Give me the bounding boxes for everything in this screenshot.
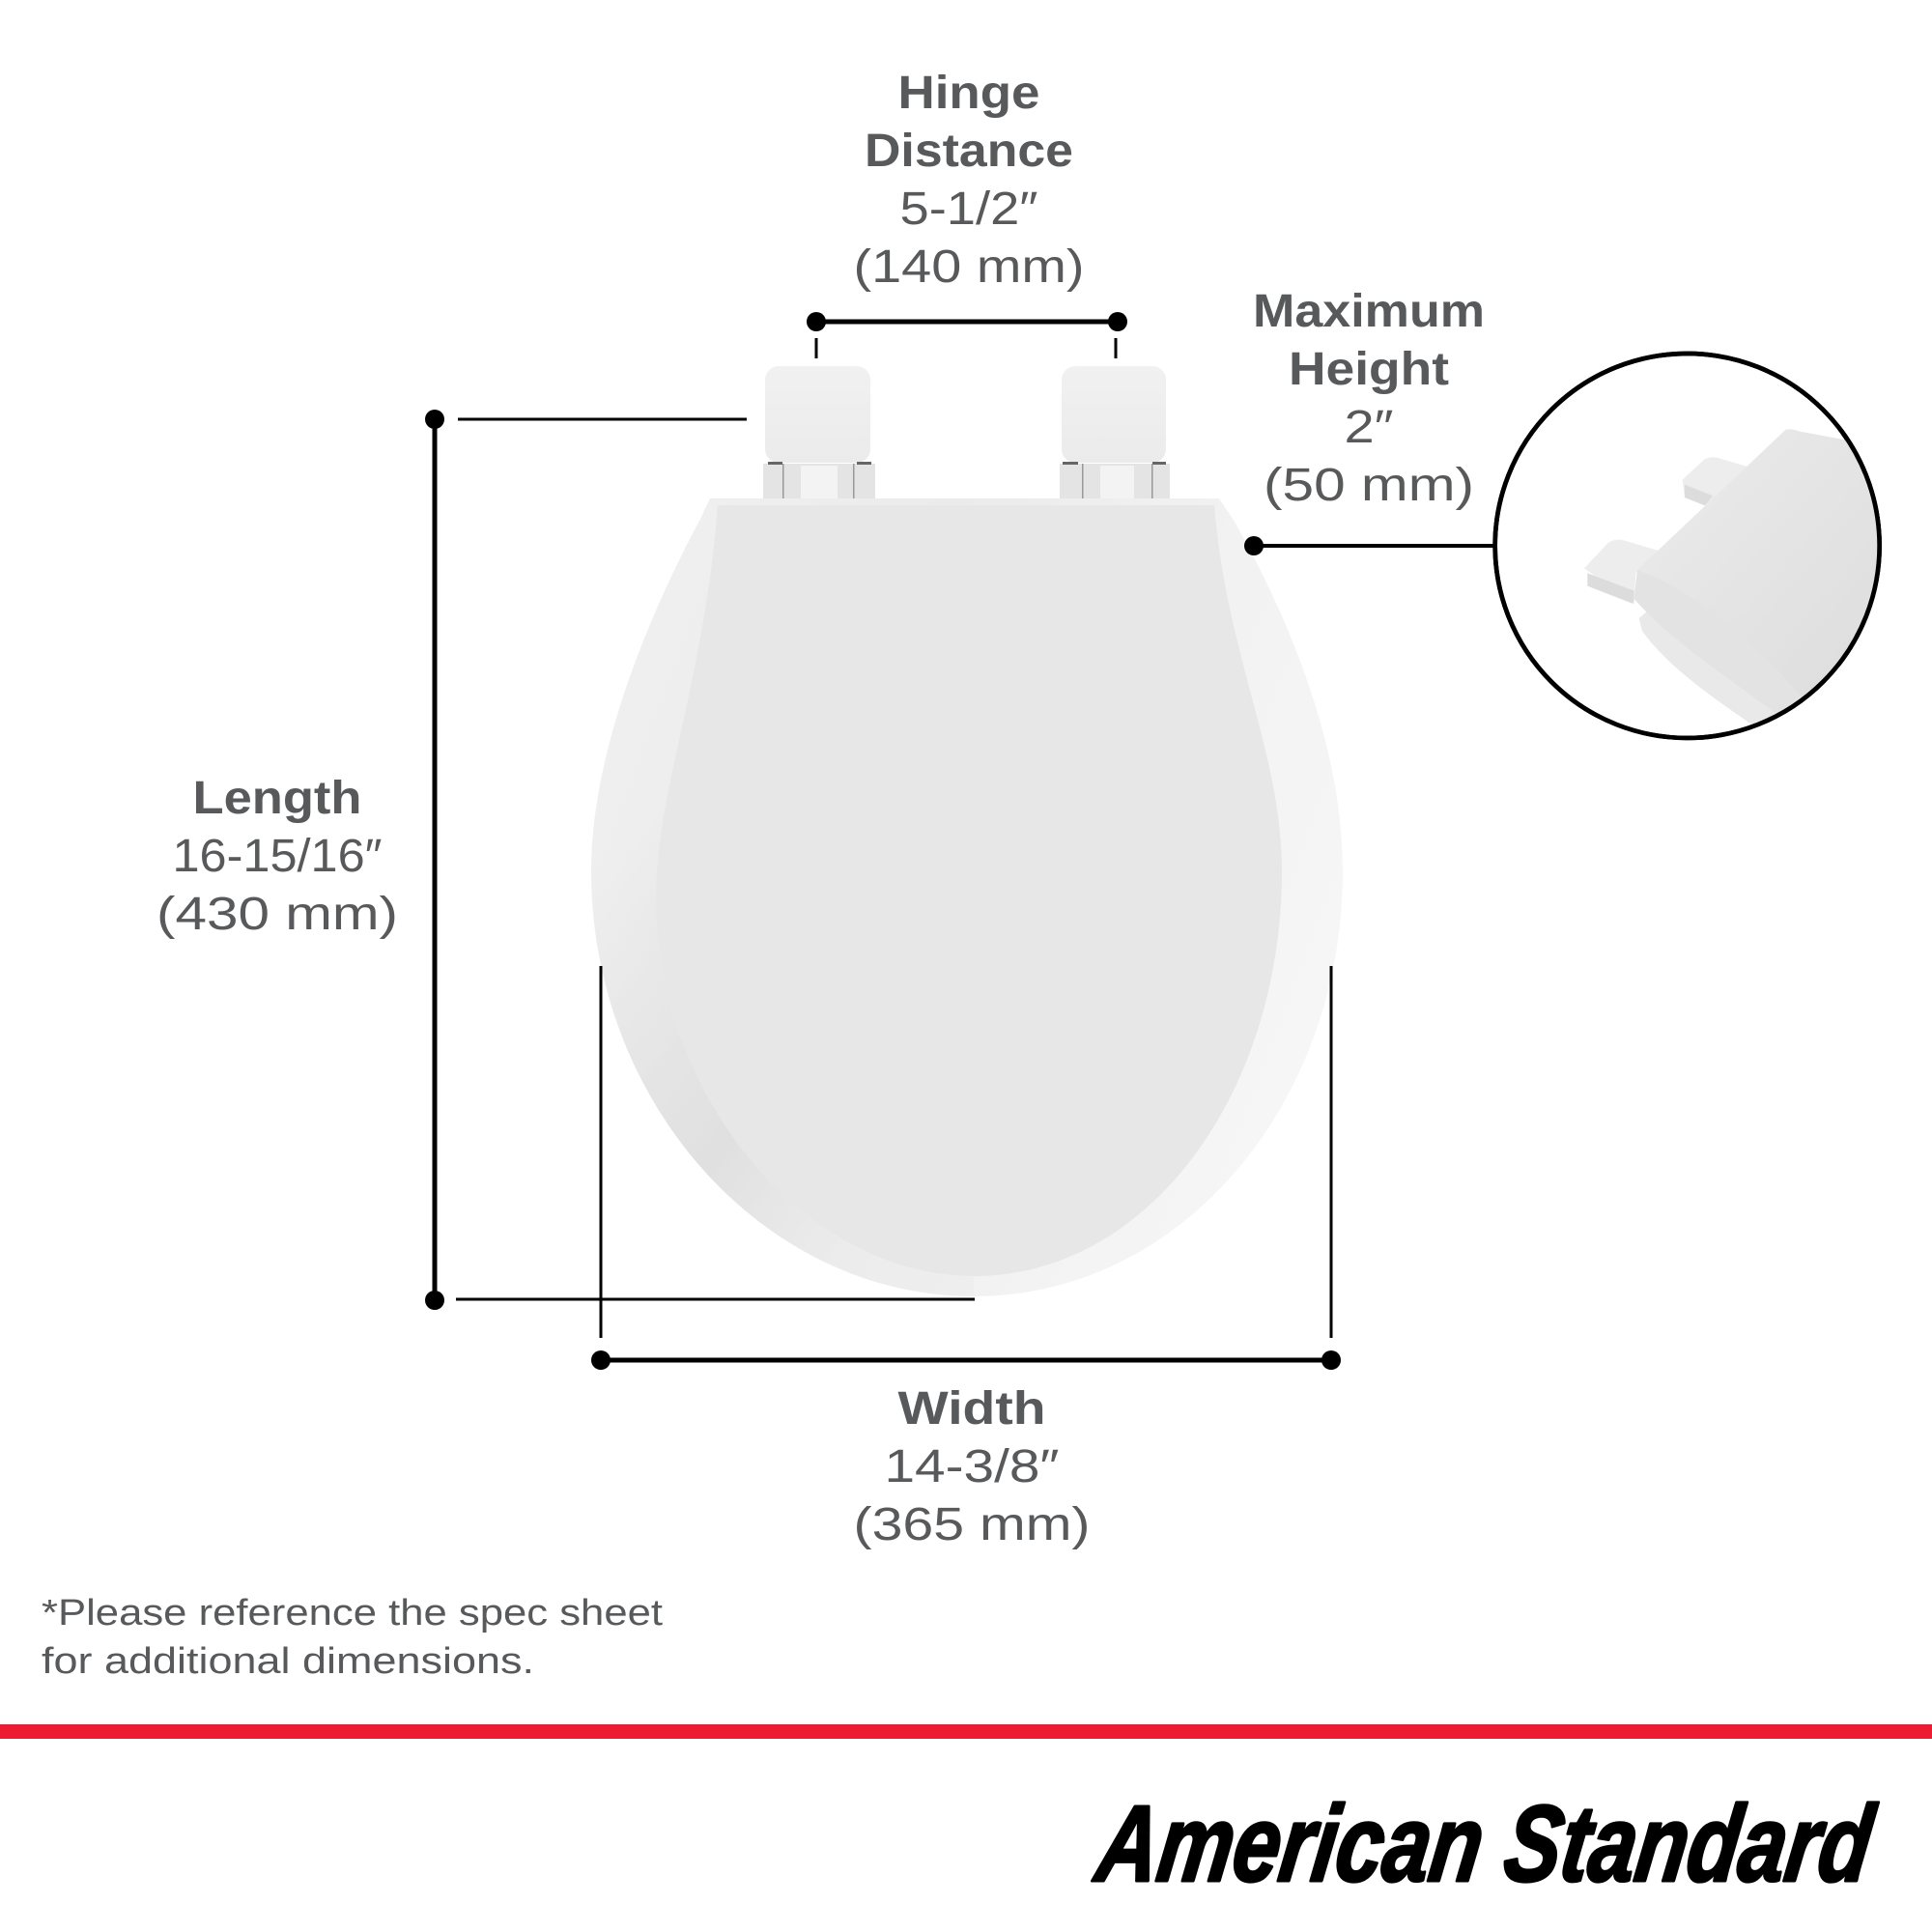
label: hinge distance: Hinge [898,68,1039,119]
label: length: Length [193,773,361,824]
label: width: 14-3/8″ [885,1441,1060,1492]
toilet seat [591,498,1343,1296]
label: maximum height: (50 mm) [1264,460,1474,511]
maximum height leader line [1244,536,1495,555]
hinge distance dimension line [807,312,1127,358]
label: hinge distance: Distance [865,126,1073,177]
width dimension line [591,966,1341,1370]
inset circle: seat side view [1495,354,1887,738]
label: length [156,773,398,940]
footnote: for additional dimensions. [42,1641,534,1682]
label: width: (365 mm) [854,1499,1090,1550]
label: length: 16-15/16″ [172,831,383,882]
footnote [42,1593,664,1682]
label: width [854,1383,1090,1550]
left hinge [763,366,875,498]
right hinge [1060,366,1170,498]
label: hinge distance: 5-1/2″ [900,184,1037,235]
label: hinge distance: (140 mm) [854,242,1084,293]
label: hinge distance [854,68,1084,293]
red divider bar [0,1724,1932,1739]
footnote: *Please reference the spec sheet [42,1593,664,1634]
label: maximum height: 2″ [1345,402,1394,453]
label: maximum height: Height [1289,344,1449,395]
label: maximum height [1253,286,1485,511]
label: width: Width [898,1383,1045,1435]
length dimension line [425,410,975,1310]
label: maximum height: Maximum [1253,286,1485,337]
label: length: (430 mm) [156,889,398,940]
